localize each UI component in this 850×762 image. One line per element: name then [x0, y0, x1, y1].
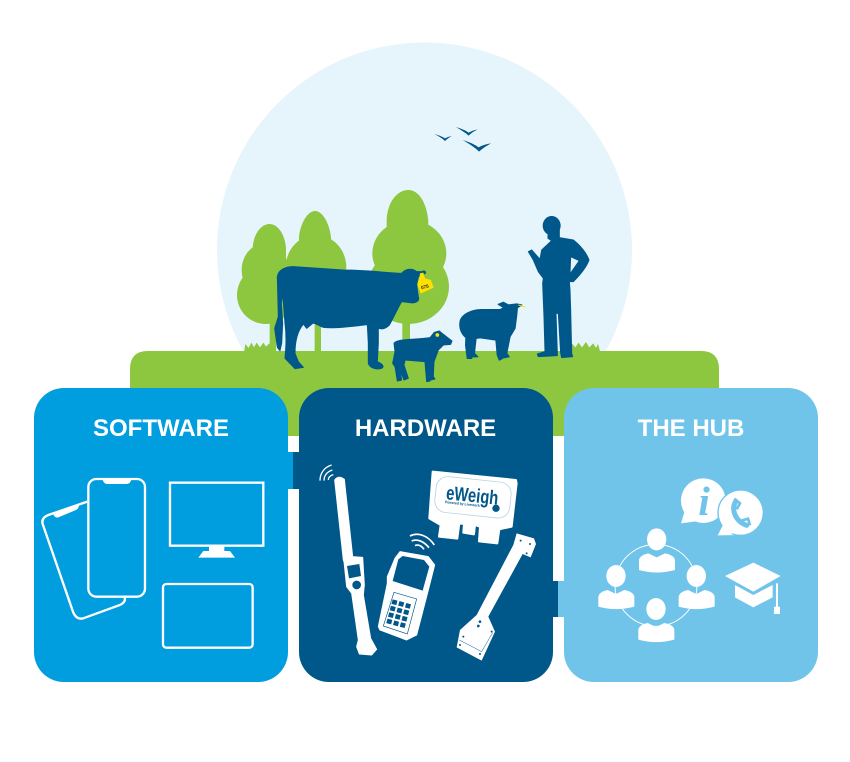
heading: hardware: HARDWARE: [355, 415, 496, 442]
trees and grass: [237, 190, 601, 353]
sheep: [460, 302, 525, 360]
monitor: [170, 483, 263, 546]
ground: [130, 351, 719, 436]
heading: software: SOFTWARE: [93, 415, 229, 442]
front phone: [88, 479, 145, 597]
panel: software: [34, 388, 288, 682]
icons: hub support: [598, 478, 781, 642]
tablet: [163, 584, 253, 648]
eWeigh unit: Powered by Livestock: [445, 500, 481, 508]
farmer with phone: [528, 216, 589, 358]
icons: hardware devices: [320, 465, 536, 661]
person right: [679, 565, 715, 609]
eWeigh unit: eWeigh: [445, 482, 499, 510]
people ring: [615, 544, 697, 626]
eWeigh unit: [429, 472, 517, 543]
calf: [393, 331, 452, 382]
panel: hardware: [299, 388, 553, 682]
phone bubble: [718, 490, 763, 535]
graduation cap: [725, 563, 781, 614]
ear tag: 075: [421, 283, 430, 290]
connectors between panels: [288, 452, 564, 617]
panel: the hub: [564, 388, 818, 682]
person bottom: [638, 598, 674, 642]
load bar: [457, 533, 536, 661]
person left: [598, 565, 634, 609]
icons: phones, monitor, tablet: [42, 479, 263, 648]
heading: the hub: THE HUB: [638, 415, 744, 442]
back phone: [42, 502, 125, 619]
info bubble: [681, 478, 726, 525]
sky circle: [217, 42, 632, 458]
ear tag: [417, 273, 434, 294]
person top: [639, 528, 675, 572]
birds: [434, 127, 491, 152]
stick reader: [320, 465, 377, 655]
handheld reader: [378, 534, 435, 640]
info bubble: i: [698, 479, 710, 525]
cow: [275, 267, 434, 369]
